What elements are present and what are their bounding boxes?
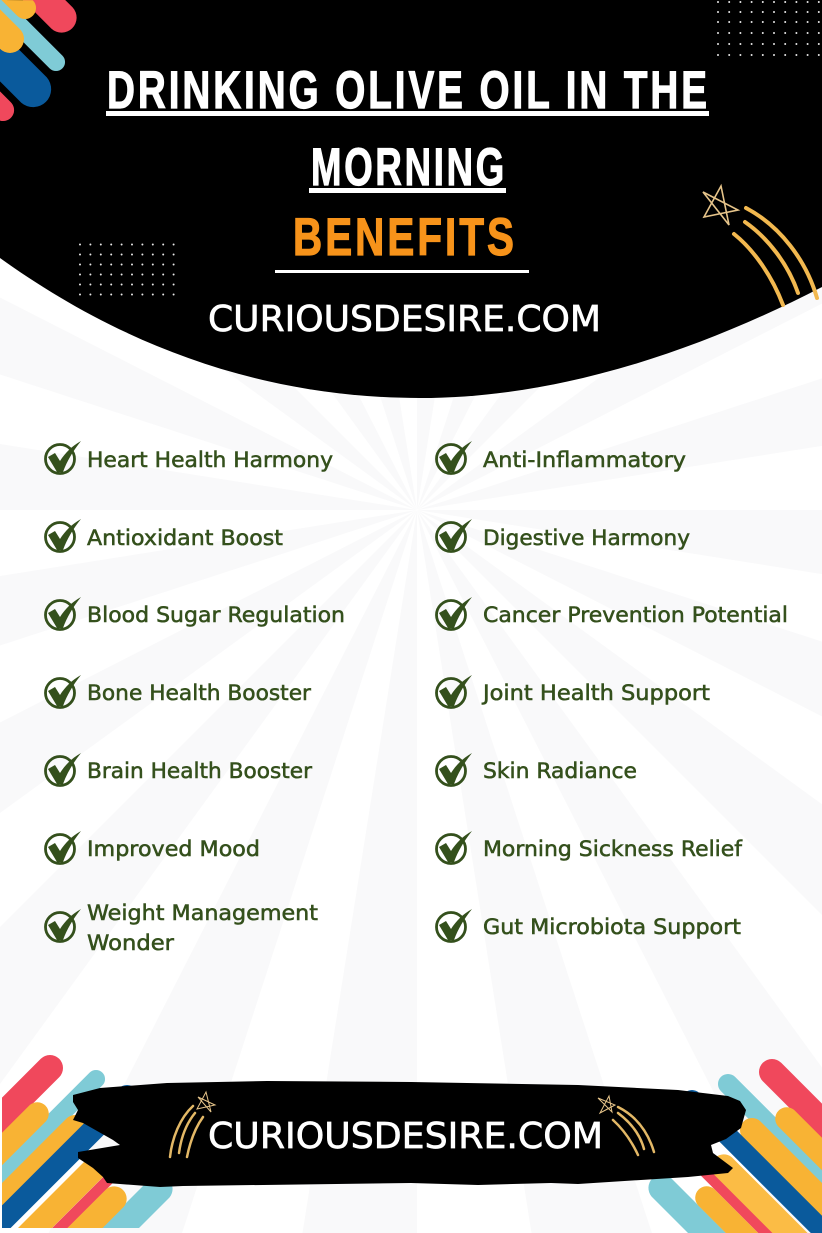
- item: skin radiance: [436, 753, 637, 786]
- item: bone health booster: [46, 675, 311, 708]
- item: gut microbiota support: Gut Microbiota Support: [483, 915, 741, 940]
- title: drinking olive oil in the morning: [106, 61, 710, 197]
- title: drinking olive oil in the morning: MORNING: [311, 138, 507, 197]
- item: brain health booster: [46, 753, 312, 786]
- benefits list: right column: [436, 441, 788, 942]
- item: antioxidant boost: Antioxidant Boost: [87, 526, 283, 551]
- item: cancer prevention potential: [436, 597, 788, 630]
- decoration: bottom-left colour stripes: [2, 1055, 173, 1228]
- item: weight management wonder: [46, 901, 318, 956]
- item: weight management wonder: Weight Management: [87, 901, 318, 926]
- benefits list: left column: [46, 441, 345, 956]
- icon: shooting star top right: [703, 186, 817, 305]
- item: morning sickness relief: Morning Sickness Relief: [483, 837, 742, 862]
- item: digestive harmony: [436, 519, 690, 552]
- item: gut microbiota support: [436, 909, 741, 942]
- item: heart health harmony: Heart Health Harmony: [87, 448, 333, 473]
- decoration: top-right dot grid: [718, 2, 821, 55]
- item: improved mood: [46, 831, 260, 864]
- decoration: left dot grid: [80, 244, 175, 294]
- item: digestive harmony: Digestive Harmony: [483, 526, 690, 551]
- item: brain health booster: Brain Health Booster: [87, 759, 312, 784]
- item: joint health support: Joint Health Support: [481, 681, 710, 706]
- item: blood sugar regulation: Blood Sugar Regulation: [87, 603, 345, 628]
- banner: black brush stroke: [73, 1081, 746, 1187]
- item: anti-inflammatory: [436, 441, 686, 474]
- decoration: bottom-right colour stripes: [648, 1059, 822, 1233]
- item: morning sickness relief: [436, 831, 742, 864]
- item: anti-inflammatory: Anti-Inflammatory: [483, 448, 686, 473]
- decoration: top-left colour stripes: [0, 0, 77, 121]
- item: improved mood: Improved Mood: [87, 837, 260, 862]
- item: skin radiance: Skin Radiance: [483, 759, 637, 784]
- heading: benefits: BENEFITS: [293, 208, 517, 267]
- item: blood sugar regulation: [46, 597, 345, 630]
- website label: header: CURIOUSDESIRE.COM: [208, 299, 601, 340]
- item: cancer prevention potential: Cancer Prevention Potential: [483, 603, 788, 628]
- item: antioxidant boost: [46, 519, 283, 552]
- item: bone health booster: Bone Health Booster: [87, 681, 311, 706]
- item: weight management wonder: Wonder: [87, 931, 174, 956]
- item: joint health support: [436, 675, 710, 708]
- website label: banner: CURIOUSDESIRE.COM: [208, 1116, 603, 1157]
- icon: shooting star banner left: [170, 1092, 215, 1157]
- icon: shooting star banner right: [598, 1096, 654, 1155]
- item: heart health harmony: [46, 441, 333, 474]
- heading: benefits: [275, 208, 529, 273]
- header: black curved panel: [0, 0, 822, 398]
